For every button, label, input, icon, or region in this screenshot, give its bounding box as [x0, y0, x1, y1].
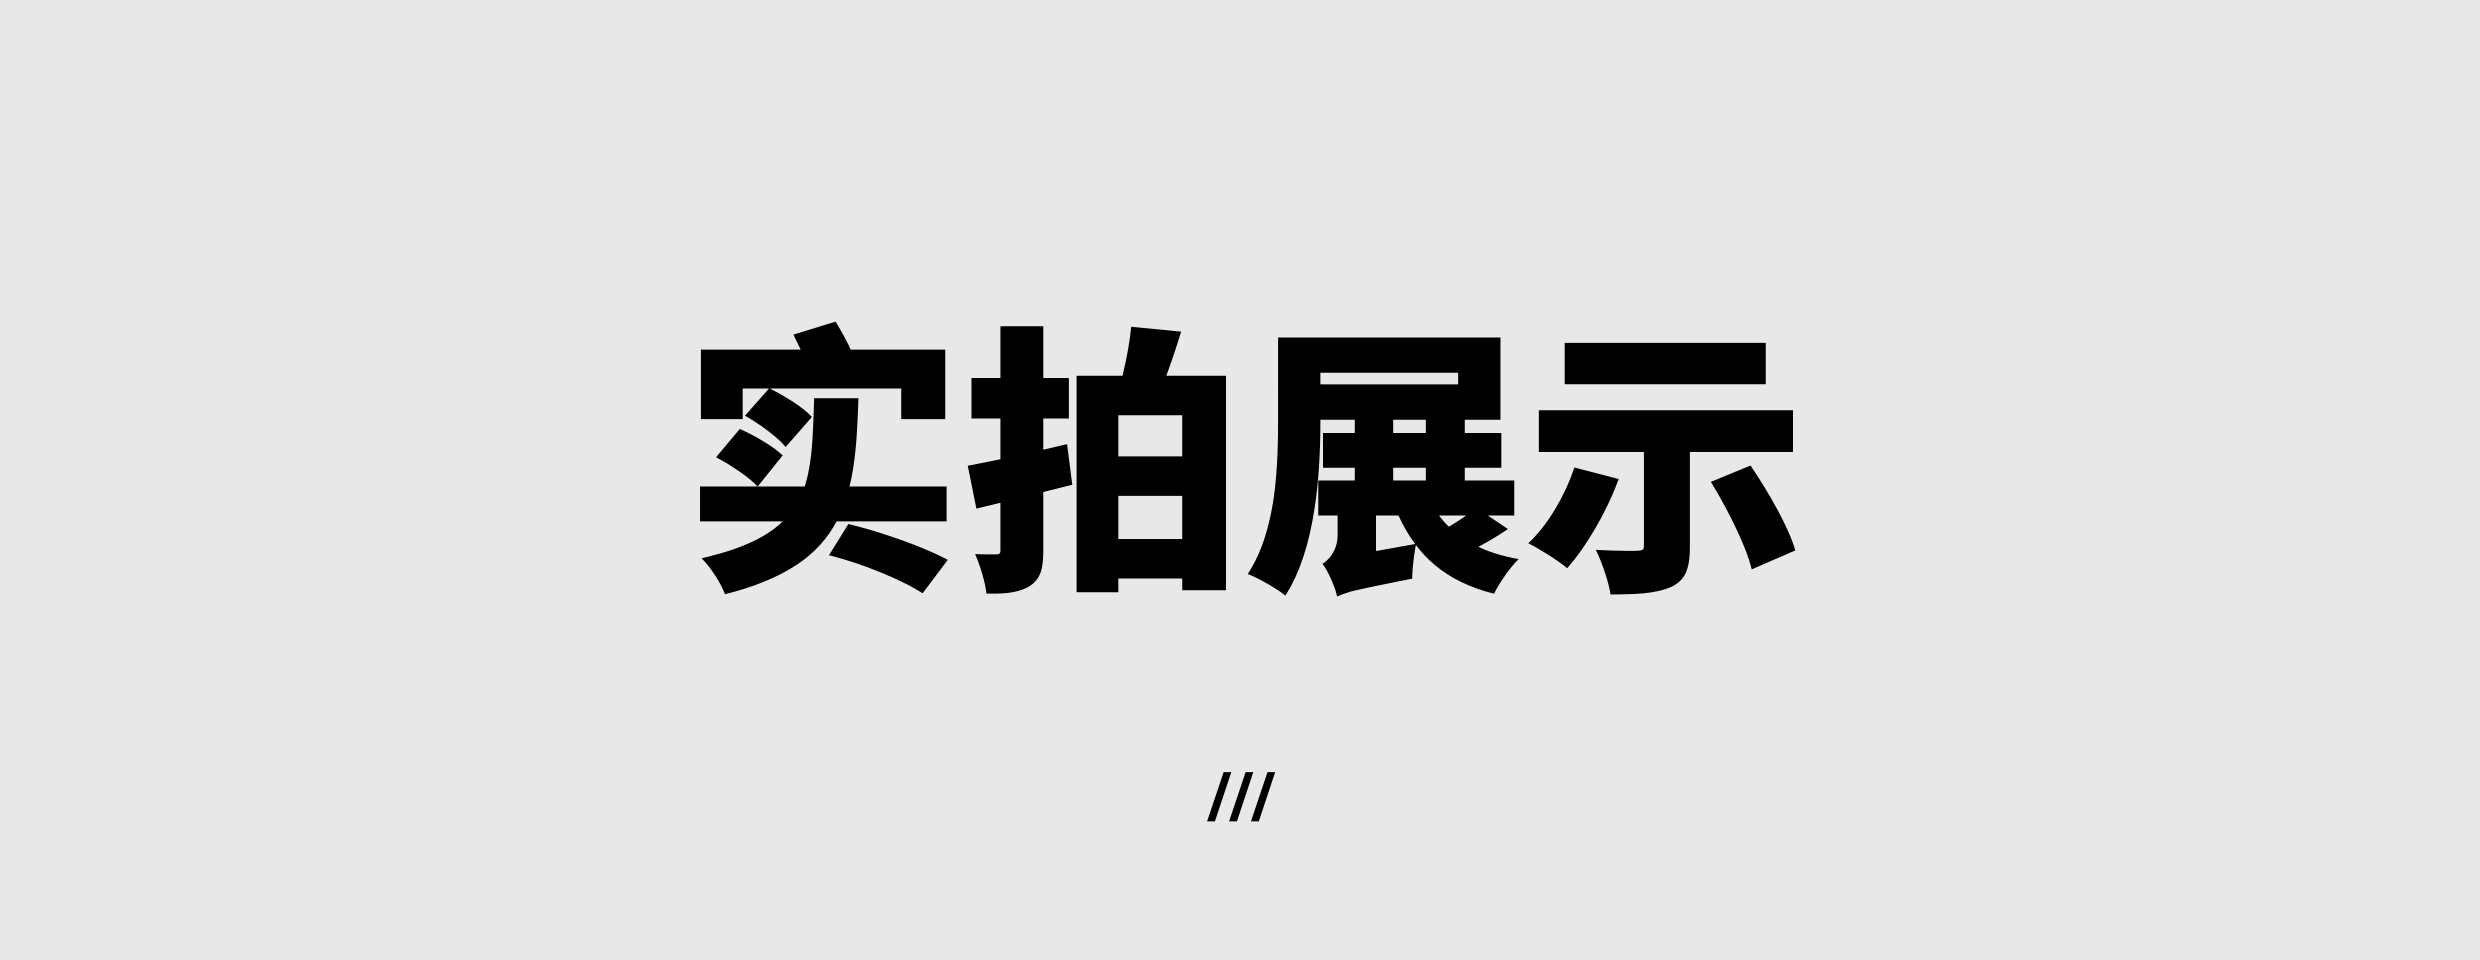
- icon: triple slash mark: ///: [1205, 760, 1281, 834]
- title: 实拍展示: [682, 313, 1806, 627]
